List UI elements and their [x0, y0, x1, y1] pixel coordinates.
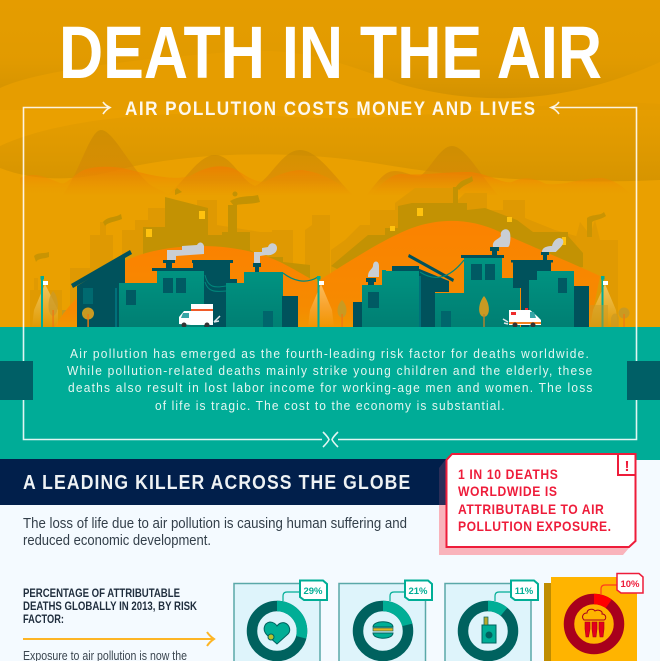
section intro text: reduced economic development. [23, 533, 211, 549]
teal ground panel [0, 327, 660, 460]
section intro text [23, 516, 407, 549]
callout: 1 in 10 deaths: 1 IN 10 DEATHS [458, 466, 558, 482]
sky background with pollution waves [0, 0, 660, 330]
card: 10% air pollution [544, 574, 643, 661]
callout: 1 in 10 deaths [439, 454, 636, 555]
chart heading: DEATHS GLOBALLY IN 2013, BY RISK [23, 601, 198, 613]
orange hills [55, 221, 600, 327]
street lamps and trees [32, 276, 630, 327]
section header band: A LEADING KILLER ACROSS THE GLOBE [23, 471, 410, 493]
chart heading: PERCENTAGE OF ATTRIBUTABLE [23, 588, 180, 600]
card: 29% [234, 580, 327, 661]
card: 11%: 11% [515, 586, 534, 597]
section intro text: The loss of life due to air pollution is causing human suffering and [23, 516, 407, 532]
arrow [23, 632, 214, 646]
callout: 1 in 10 deaths: WORLDWIDE IS [458, 483, 557, 499]
intro paragraph: While pollution-related deaths mainly strike young children and the elderly, these [67, 364, 592, 378]
factory smoke left [167, 242, 277, 263]
frame with arrows [24, 102, 636, 447]
callout: 1 in 10 deaths: POLLUTION EXPOSURE. [458, 518, 611, 534]
intro paragraph: Air pollution has emerged as the fourth-leading risk factor for deaths worldwide. [70, 347, 589, 361]
callout: 1 in 10 deaths: ATTRIBUTABLE TO AIR [458, 501, 604, 517]
chart heading: FACTOR: [23, 614, 64, 626]
subtitle: AIR POLLUTION COSTS MONEY AND LIVES [125, 97, 535, 119]
side tabs [0, 361, 660, 400]
smog mountains [20, 130, 632, 196]
right foreground buildings [353, 247, 589, 327]
card: 11% [445, 580, 538, 661]
card: 29%: 29% [303, 586, 323, 597]
factory smoke right [368, 229, 563, 277]
ambulance [503, 308, 541, 328]
intro paragraph: deaths also result in lost labor income for working-age men and women. The loss [68, 381, 592, 395]
intro paragraph: of life is tragic. The cost to the economy is substantial. [155, 399, 505, 413]
card: 21%: 21% [408, 586, 428, 597]
card: 10% air pollution: 10% [620, 579, 640, 590]
left foreground buildings [71, 250, 318, 327]
chart heading [23, 588, 198, 626]
delivery truck [179, 304, 220, 328]
intro paragraph [67, 347, 592, 413]
section header band [0, 459, 446, 505]
callout: 1 in 10 deaths: ! [624, 458, 630, 475]
background city silhouette [30, 176, 618, 327]
card: 21% [339, 580, 432, 661]
